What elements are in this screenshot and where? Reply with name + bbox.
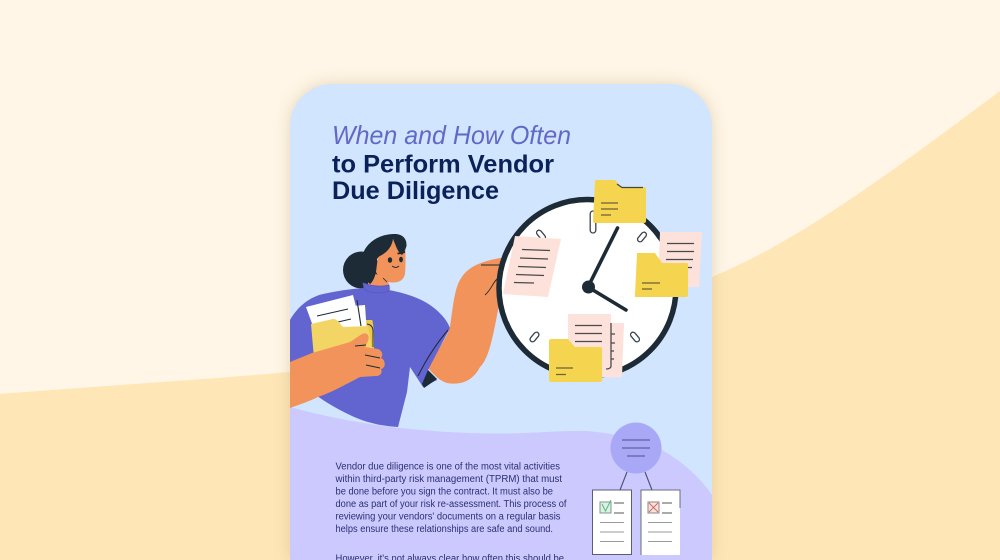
- collar: [363, 283, 389, 293]
- paragraph one: reviewing your vendors' documents on a regular basis: [336, 512, 560, 522]
- finger creases: [355, 345, 380, 368]
- left arm: [290, 333, 385, 408]
- right arm: [428, 257, 506, 384]
- paper: right: [658, 232, 702, 287]
- folder back: [366, 320, 374, 348]
- folder: top: [593, 180, 646, 223]
- diagram: document review: [592, 422, 680, 555]
- document: rejected: [640, 490, 680, 555]
- paragraph one: helps ensure these relationships are safe and sound.: [336, 524, 553, 535]
- paragraph one: done as part of your risk re-assessment. This process of: [336, 499, 567, 510]
- folder held: [306, 295, 374, 358]
- face: [376, 240, 406, 283]
- hair bun: [343, 252, 380, 288]
- clock hub: [582, 280, 595, 294]
- folder: bottom: [549, 339, 602, 382]
- paper: left: [503, 236, 561, 297]
- folder: right: [635, 253, 688, 297]
- card shadow: [290, 84, 712, 560]
- circle node: [610, 422, 662, 474]
- neck: [368, 274, 390, 290]
- panel: card: [290, 84, 712, 560]
- lavender wave section: [290, 407, 712, 560]
- folder front: [311, 319, 372, 352]
- paper front sheet: [306, 295, 356, 327]
- paper back sheet: [356, 305, 366, 326]
- clock hands: [588, 228, 626, 310]
- sleeve cuff shadow: [422, 370, 437, 388]
- title: [332, 120, 571, 205]
- paragraph one: within third-party risk management (TPRM) that must: [335, 474, 562, 485]
- title line: italic: When and How Often: [332, 120, 571, 150]
- connector lines: [620, 472, 652, 490]
- paragraph one: [335, 462, 567, 535]
- body text: [335, 462, 567, 560]
- clock hour marks: [529, 211, 647, 343]
- paper lines: [317, 300, 361, 326]
- illustration: clock: [499, 180, 702, 382]
- hair top: [361, 234, 407, 284]
- paragraph one: Vendor due diligence is one of the most vital activities: [336, 462, 560, 472]
- paper stack: bottom: [568, 314, 624, 378]
- title line: bold two: Due Diligence: [332, 177, 499, 205]
- face features: [383, 251, 405, 282]
- clock face: [499, 200, 676, 376]
- illustration: person: [290, 234, 450, 427]
- hand creases: [481, 265, 501, 295]
- title line: bold one: to Perform Vendor: [332, 150, 554, 178]
- sleeve edge: [418, 330, 448, 376]
- torso: [290, 288, 450, 427]
- paragraph one: be done before you sign the contract. It must also be: [336, 486, 553, 498]
- document: approved: [592, 490, 632, 554]
